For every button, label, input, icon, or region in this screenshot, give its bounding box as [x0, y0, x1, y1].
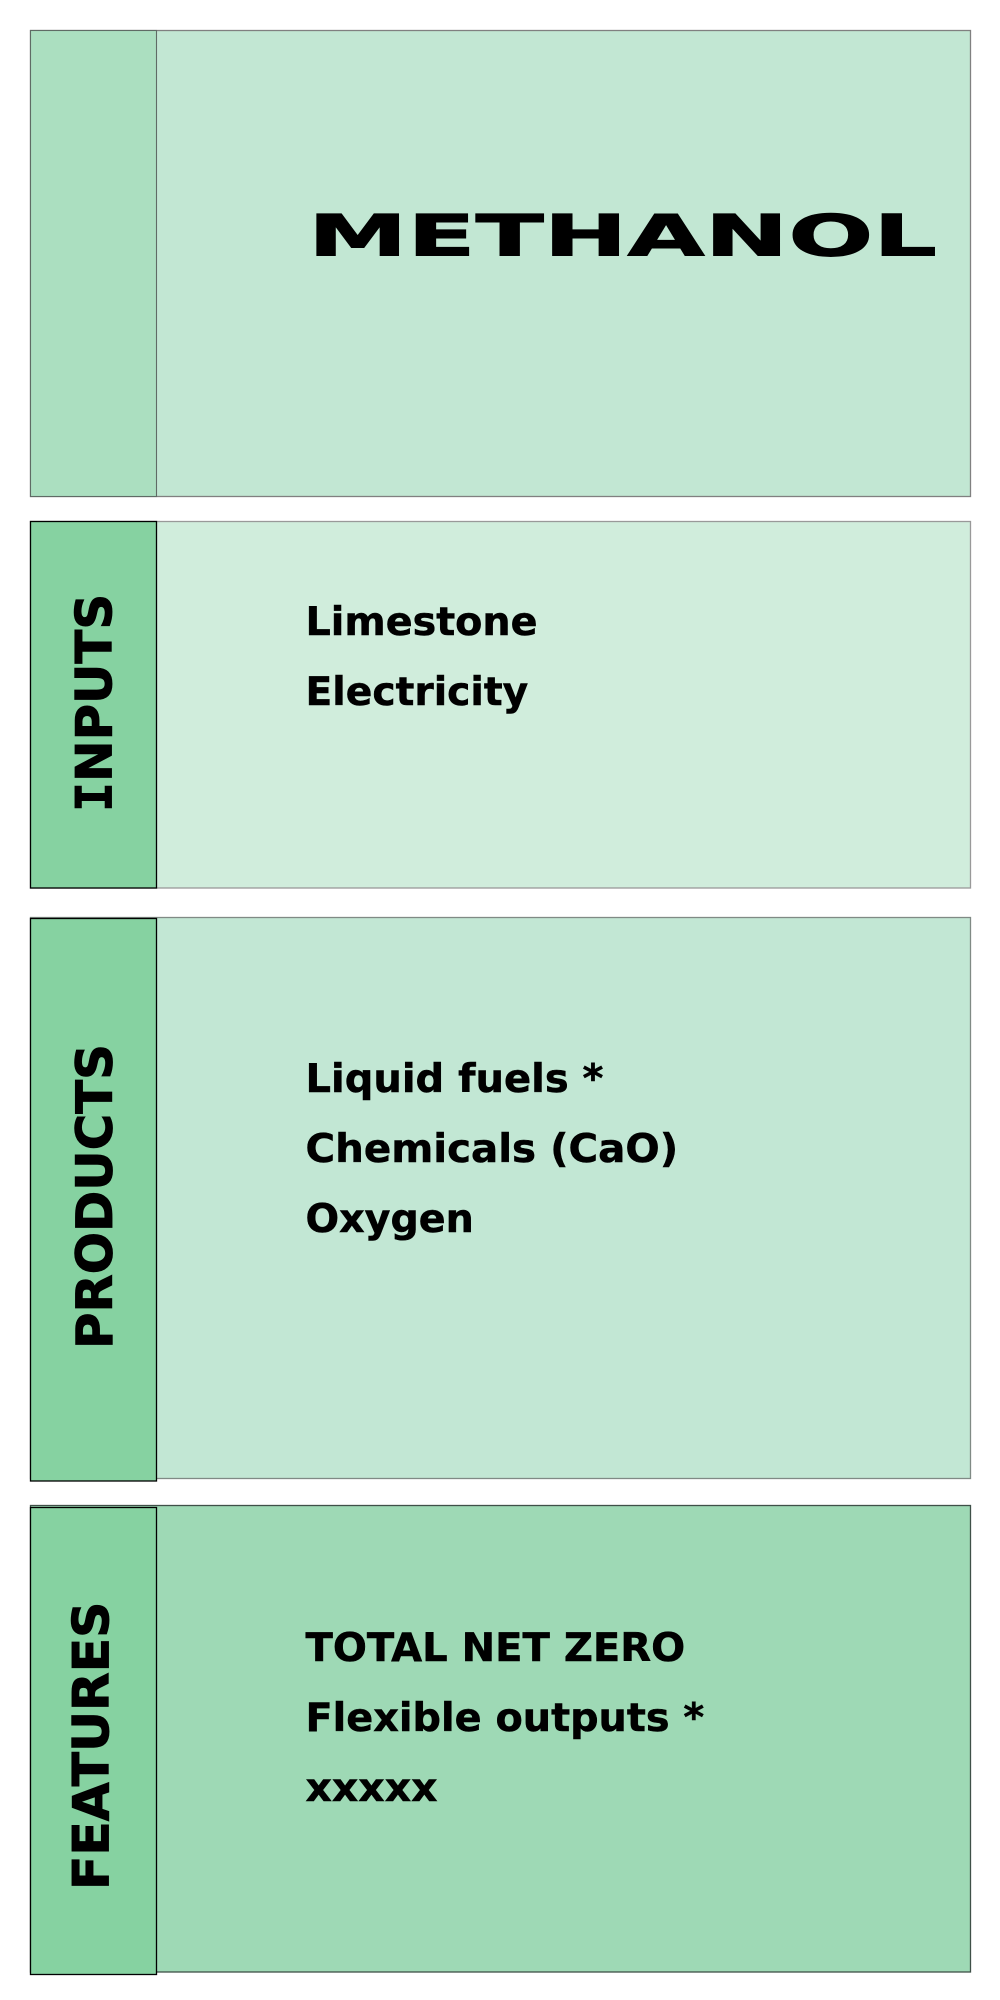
item: limestone: Limestone: [306, 599, 538, 645]
inputs label: INPUTS: [65, 594, 124, 812]
products sidebar: [30, 918, 156, 1481]
title: METHANOL: [308, 203, 937, 270]
features list: [306, 1626, 704, 1811]
products list: [306, 1056, 678, 1242]
products label: PRODUCTS: [66, 1044, 124, 1349]
inputs list: [306, 599, 538, 715]
item: xxxxx: xxxxx: [306, 1766, 438, 1811]
item: oxygen: Oxygen: [306, 1197, 474, 1242]
item: total net zero: TOTAL NET ZERO: [306, 1626, 685, 1671]
panel: products: [30, 918, 970, 1481]
item: chemicals: Chemicals (CaO): [306, 1127, 678, 1172]
products panel background: [30, 918, 970, 1478]
features panel background: [30, 1506, 970, 1972]
item: flexible outputs: Flexible outputs *: [306, 1695, 704, 1741]
panel: features: [30, 1506, 970, 1974]
methanol panel background: [30, 30, 970, 496]
item: liquid fuels: Liquid fuels *: [306, 1056, 603, 1102]
item: electricity: Electricity: [306, 670, 528, 715]
panel: methanol title: [30, 30, 970, 496]
inputs panel background: [30, 522, 970, 888]
features label: FEATURES: [62, 1602, 120, 1890]
methanol sidebar: [30, 30, 156, 496]
features sidebar: [30, 1508, 156, 1974]
inputs sidebar: [30, 522, 156, 888]
panel: inputs: [30, 522, 970, 888]
